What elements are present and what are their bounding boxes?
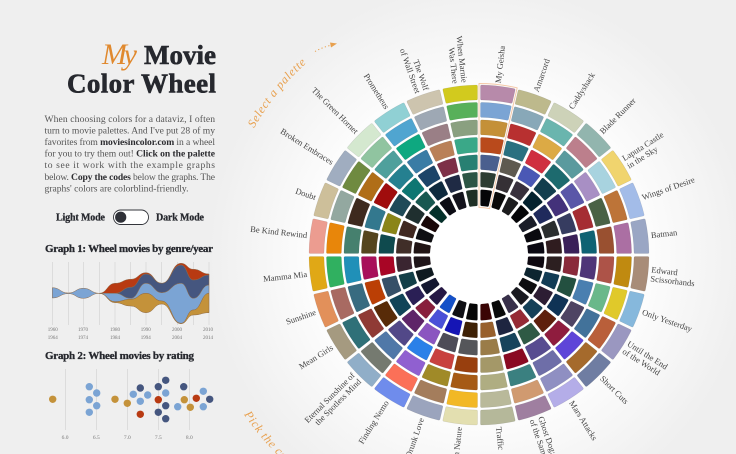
palette labels: When Marnie [454, 35, 470, 83]
graph 1: streamgraph: 2014 [203, 336, 214, 341]
light/dark mode toggle: Dark Mode [156, 212, 205, 224]
palette labels: The Wolf [411, 58, 431, 92]
graph 1: streamgraph: 2010 [203, 328, 214, 333]
palette: Until the End of the World [511, 266, 632, 360]
palette labels: Mean Girls [297, 342, 335, 371]
intro text: below. Copy the codes below the graphs. The [44, 172, 215, 183]
palette: The Green Hornet [346, 122, 457, 233]
intro text: for you to try them out! Click on the palette [44, 149, 216, 160]
graph 2: beeswarm: 8.0 [186, 435, 193, 441]
palette labels: Amarcord [531, 57, 552, 93]
palette: Finding Nemo [374, 287, 468, 408]
light/dark mode toggle: Light Mode [56, 212, 106, 224]
palette labels: Sunshine [284, 307, 317, 327]
palette: My Geisha [465, 82, 517, 210]
graph 1: streamgraph: 1984 [110, 336, 120, 341]
palette: Sunshine [313, 255, 439, 328]
title: Color Wheel [67, 68, 216, 98]
graph 2: beeswarm: 6.0 [62, 435, 69, 441]
graph 2: beeswarm [49, 369, 213, 441]
palette labels: Short Cuts [598, 373, 631, 406]
palette labels: Scissorhands [650, 273, 695, 288]
palette: Mean Girls [326, 266, 447, 360]
palette labels: Caddyshack [566, 70, 597, 111]
palette labels [250, 35, 696, 454]
title [67, 38, 216, 98]
palette labels: Batman [650, 227, 678, 240]
palette labels: Was There [447, 47, 461, 84]
palette labels: Until the End [625, 339, 670, 371]
palette: Prometheus [374, 102, 468, 223]
graph 1: streamgraph: 1964 [48, 336, 58, 341]
graph 2 heading: Graph 2: Wheel movies by rating [45, 350, 194, 362]
palette: Short Cuts [501, 277, 612, 388]
graph 1: streamgraph: 2004 [172, 336, 182, 341]
palette labels: Eternal Sunshine of [302, 370, 357, 425]
palette labels: Wings of Desire [640, 174, 696, 202]
palette labels: Be Kind Rewind [250, 224, 308, 240]
palette: Mamma Mia [308, 243, 432, 291]
graph 1: streamgraph: 1970 [78, 328, 88, 333]
graph 1: streamgraph [48, 262, 214, 341]
palette: Mars Attacks [490, 287, 584, 408]
palette: Traffic [467, 302, 515, 426]
palette: Caddyshack [490, 102, 584, 223]
palette labels: Doubt [294, 186, 318, 202]
graph 1: streamgraph: 1994 [141, 336, 151, 341]
palette labels: Only Yesterday [641, 307, 694, 334]
intro text: graphs' colors are colorblind-friendly. [44, 183, 188, 194]
palette labels: Traffic [494, 426, 506, 451]
palette labels: of the World [621, 346, 663, 378]
palette labels: Prometheus [362, 72, 392, 111]
annotation: select a palette: Select a palette [248, 60, 306, 128]
palette labels: Mamma Mia [263, 269, 308, 284]
intro text [44, 114, 216, 194]
palette labels: Mars Attacks [567, 399, 600, 442]
palette labels: Broken Embraces [279, 126, 335, 167]
graph 1: streamgraph: 2000 [172, 328, 182, 333]
intro text: When choosing colors for a dataviz, I often [44, 114, 215, 125]
graph 1: streamgraph: 1990 [141, 328, 151, 333]
palette: The Wolf of Wall Street [406, 89, 479, 215]
color wheel [308, 82, 650, 426]
title: Movie [144, 40, 216, 70]
graph 1 heading: Graph 1: Wheel movies by genre/year [45, 243, 213, 255]
graph 1: streamgraph: 1980 [110, 328, 120, 333]
palette: Punch-Drunk Love [406, 295, 479, 421]
palette labels: in the Sky [625, 143, 660, 171]
graph 1: streamgraph: 1974 [78, 336, 88, 341]
palette: When Marnie Was There [443, 84, 491, 208]
intro text: turn to movie palettes. And I've put 28 of my [44, 125, 215, 136]
palette: Eternal Sunshine [346, 277, 457, 388]
palette: Ghost Dog [479, 295, 552, 421]
annotation: select a palette [248, 42, 337, 128]
palette: Edward Scissorhands [526, 243, 650, 291]
palette: Batman [526, 219, 650, 267]
graph 1: streamgraph: 1960 [48, 328, 58, 333]
palette: Wings of Desire [519, 182, 645, 255]
palette labels: The Green Hornet [310, 85, 361, 136]
palette: Human Nature [443, 302, 491, 426]
palette: Laputa [511, 150, 632, 244]
graph 2: beeswarm: 7.5 [155, 435, 162, 441]
palette: Blade Runner [501, 122, 612, 233]
palette labels: My Geisha [493, 45, 507, 84]
palette labels: of Wall Street [398, 47, 423, 95]
palette labels: Edward [651, 264, 678, 277]
palette: Be Kind Rewind [308, 219, 432, 267]
intro text: to see it work with the example graphs [44, 160, 215, 171]
graph 2: beeswarm: 6.5 [93, 435, 100, 441]
palette labels: Blade Runner [597, 95, 638, 136]
palette labels: Laputa Castle [620, 130, 665, 163]
palette: Doubt [313, 182, 439, 255]
graph 2: beeswarm: 7.0 [124, 435, 131, 441]
palette labels: Finding Nemo [356, 399, 391, 446]
palette labels: the Spotless Mind [313, 376, 364, 427]
palette: Broken Embraces [326, 150, 447, 244]
light/dark mode toggle [56, 210, 205, 224]
palette: Only Yesterday [519, 255, 645, 328]
title: My [101, 38, 138, 71]
palette: Amarcord [479, 89, 552, 215]
intro text: favorites from moviesincolor.com in a wheel [44, 137, 215, 148]
